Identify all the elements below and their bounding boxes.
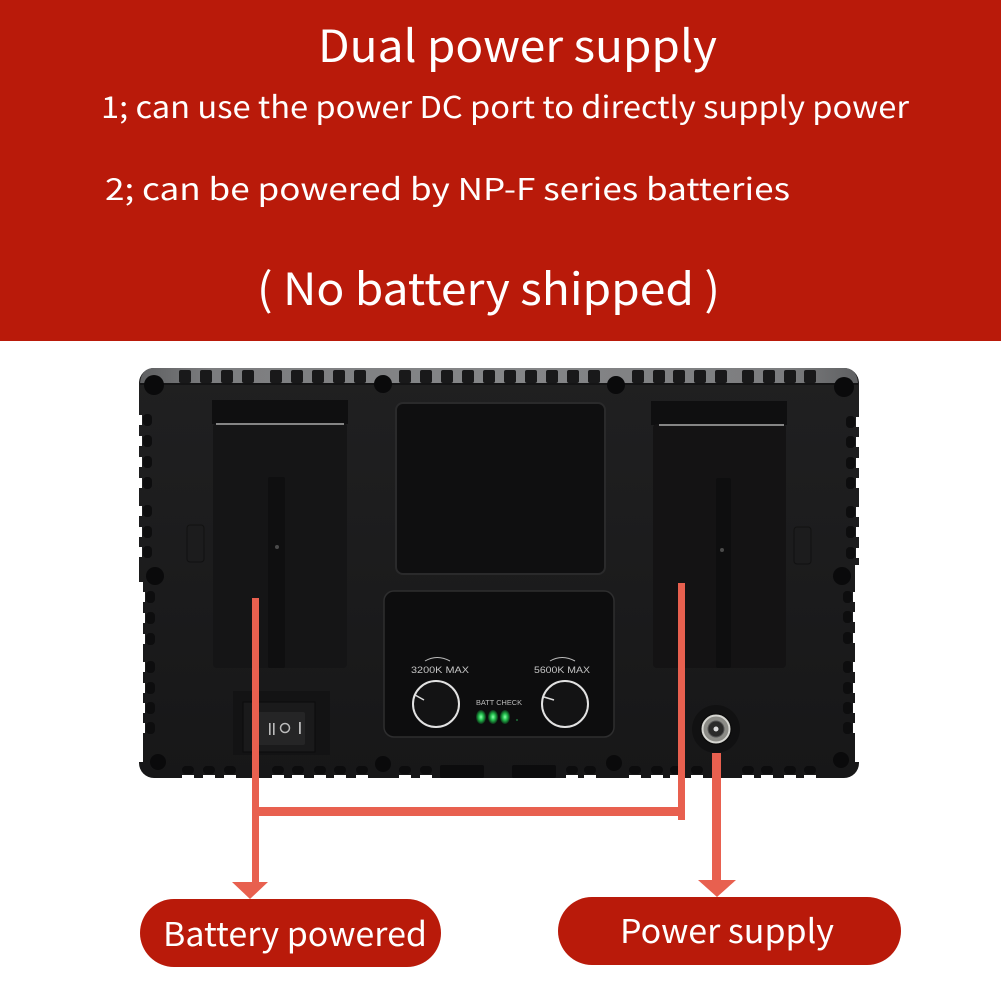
title: Dual power supply (318, 11, 717, 75)
pill: power supply: Power supply (620, 905, 834, 953)
side vent holes (143, 414, 855, 734)
panel: control plate (384, 591, 614, 737)
label: battery check: BATT CHECK (476, 698, 522, 707)
knob: 3200K (413, 681, 459, 727)
battery: left (187, 400, 348, 668)
battery: right (651, 401, 811, 668)
panel: red header banner (0, 0, 1001, 341)
pill: power supply (558, 897, 901, 965)
text: battery power line: 2; can be powered by NP-F series batteries (105, 165, 790, 209)
DC power port (692, 705, 740, 753)
label: 3200K MAX: 3200K MAX (411, 665, 470, 676)
device body (139, 368, 859, 778)
text: no battery notice: ( No battery shipped ) (257, 254, 720, 318)
bottom edge cut-outs (182, 775, 816, 778)
knob: 5600K (542, 681, 588, 727)
screw holes (144, 375, 854, 772)
bottom vent holes (182, 765, 816, 778)
straight lower side edges (139, 565, 859, 762)
text: DC port power line: 1; can use the power DC port to directly supply power (101, 83, 909, 127)
arrow: power supply (698, 753, 736, 897)
pill: battery powered (140, 899, 441, 967)
top vent notches (179, 370, 816, 383)
arrow: left knob direction (425, 658, 450, 661)
power rocker switch (233, 691, 330, 755)
side edge cut-outs (139, 415, 859, 733)
panel: top centre rectangle (396, 403, 605, 574)
panel: LED light back view (139, 368, 859, 778)
battery level LEDs (476, 710, 518, 724)
arrow: right knob direction (550, 658, 575, 661)
label: 5600K MAX: 5600K MAX (534, 665, 591, 676)
arrow: battery connector lines (232, 583, 685, 899)
pill: battery powered: Battery powered (163, 908, 427, 956)
